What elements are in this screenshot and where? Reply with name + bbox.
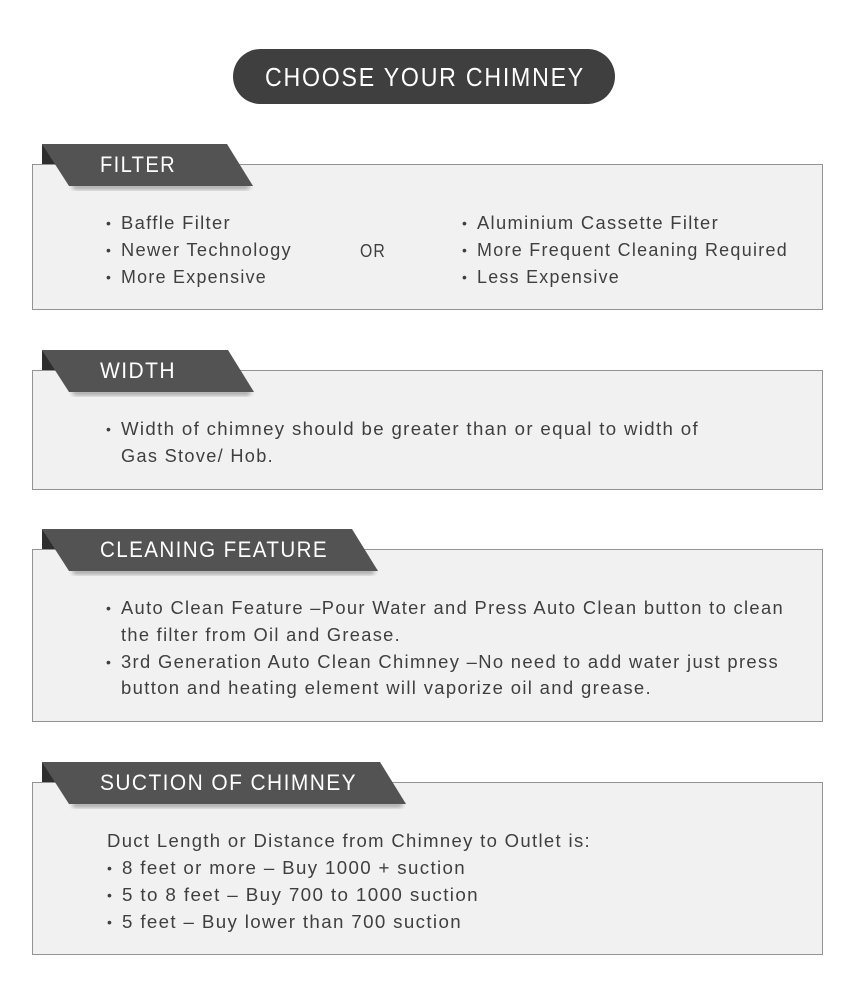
panel: width: [32, 350, 822, 490]
text block: cleaning points: button and heating element will vaporize oil and grease.: [121, 678, 652, 698]
text block: cleaning points: [106, 598, 784, 698]
text block: width advice: Width of chimney should be greater than or equal to width of: [121, 419, 699, 439]
text block: baffle filter points: Baffle Filter: [121, 213, 231, 233]
text block: baffle filter points: •: [106, 242, 111, 258]
title: CHOOSE YOUR CHIMNEY: [265, 62, 585, 92]
text block: width advice: •: [106, 421, 111, 437]
text block: aluminium filter points: [462, 213, 788, 287]
text block: width advice: Gas Stove/ Hob.: [121, 446, 274, 466]
heading: width: [42, 350, 254, 395]
text block: aluminium filter points: Less Expensive: [477, 267, 620, 287]
text block: suction guidance: •: [107, 860, 112, 876]
heading: suction of chimney: SUCTION OF CHIMNEY: [100, 770, 357, 795]
title: [233, 49, 615, 104]
text block: baffle filter points: •: [106, 269, 111, 285]
text block: aluminium filter points: More Frequent Cleaning Required: [477, 240, 788, 260]
heading: filter: FILTER: [100, 152, 176, 177]
text block: aluminium filter points: •: [462, 242, 467, 258]
text block: suction guidance: [107, 831, 591, 932]
text block: baffle filter points: [106, 213, 292, 287]
text block: width advice: [106, 419, 699, 466]
text block: cleaning points: Auto Clean Feature –Pour Water and Press Auto Clean button to clean: [121, 598, 784, 618]
heading: suction of chimney: [42, 762, 406, 807]
text block: cleaning points: the filter from Oil and Grease.: [121, 625, 401, 645]
text block: suction guidance: •: [107, 887, 112, 903]
text block: baffle filter points: •: [106, 215, 111, 231]
text block: cleaning points: 3rd Generation Auto Clean Chimney –No need to add water just press: [121, 652, 779, 672]
heading: cleaning feature: [42, 529, 378, 574]
panel: filter: [32, 144, 822, 310]
text block: suction guidance: •: [107, 914, 112, 930]
text block: baffle filter points: Newer Technology: [121, 240, 292, 260]
text block: suction guidance: 5 to 8 feet – Buy 700 to 1000 suction: [122, 885, 479, 905]
text block: suction guidance: Duct Length or Distance from Chimney to Outlet is:: [107, 831, 591, 851]
text block: suction guidance: 8 feet or more – Buy 1000 + suction: [122, 858, 466, 878]
text block: cleaning points: •: [106, 600, 111, 616]
panel: suction of chimney: [32, 762, 822, 954]
text: or: OR: [360, 241, 386, 261]
text block: cleaning points: •: [106, 654, 111, 670]
heading: filter: [42, 144, 253, 189]
text block: suction guidance: 5 feet – Buy lower than 700 suction: [122, 912, 462, 932]
text block: aluminium filter points: •: [462, 269, 467, 285]
panel: cleaning feature: [32, 529, 822, 722]
text block: baffle filter points: More Expensive: [121, 267, 267, 287]
text block: aluminium filter points: Aluminium Cassette Filter: [477, 213, 719, 233]
heading: width: WIDTH: [100, 358, 176, 383]
heading: cleaning feature: CLEANING FEATURE: [100, 537, 328, 562]
text block: aluminium filter points: •: [462, 215, 467, 231]
